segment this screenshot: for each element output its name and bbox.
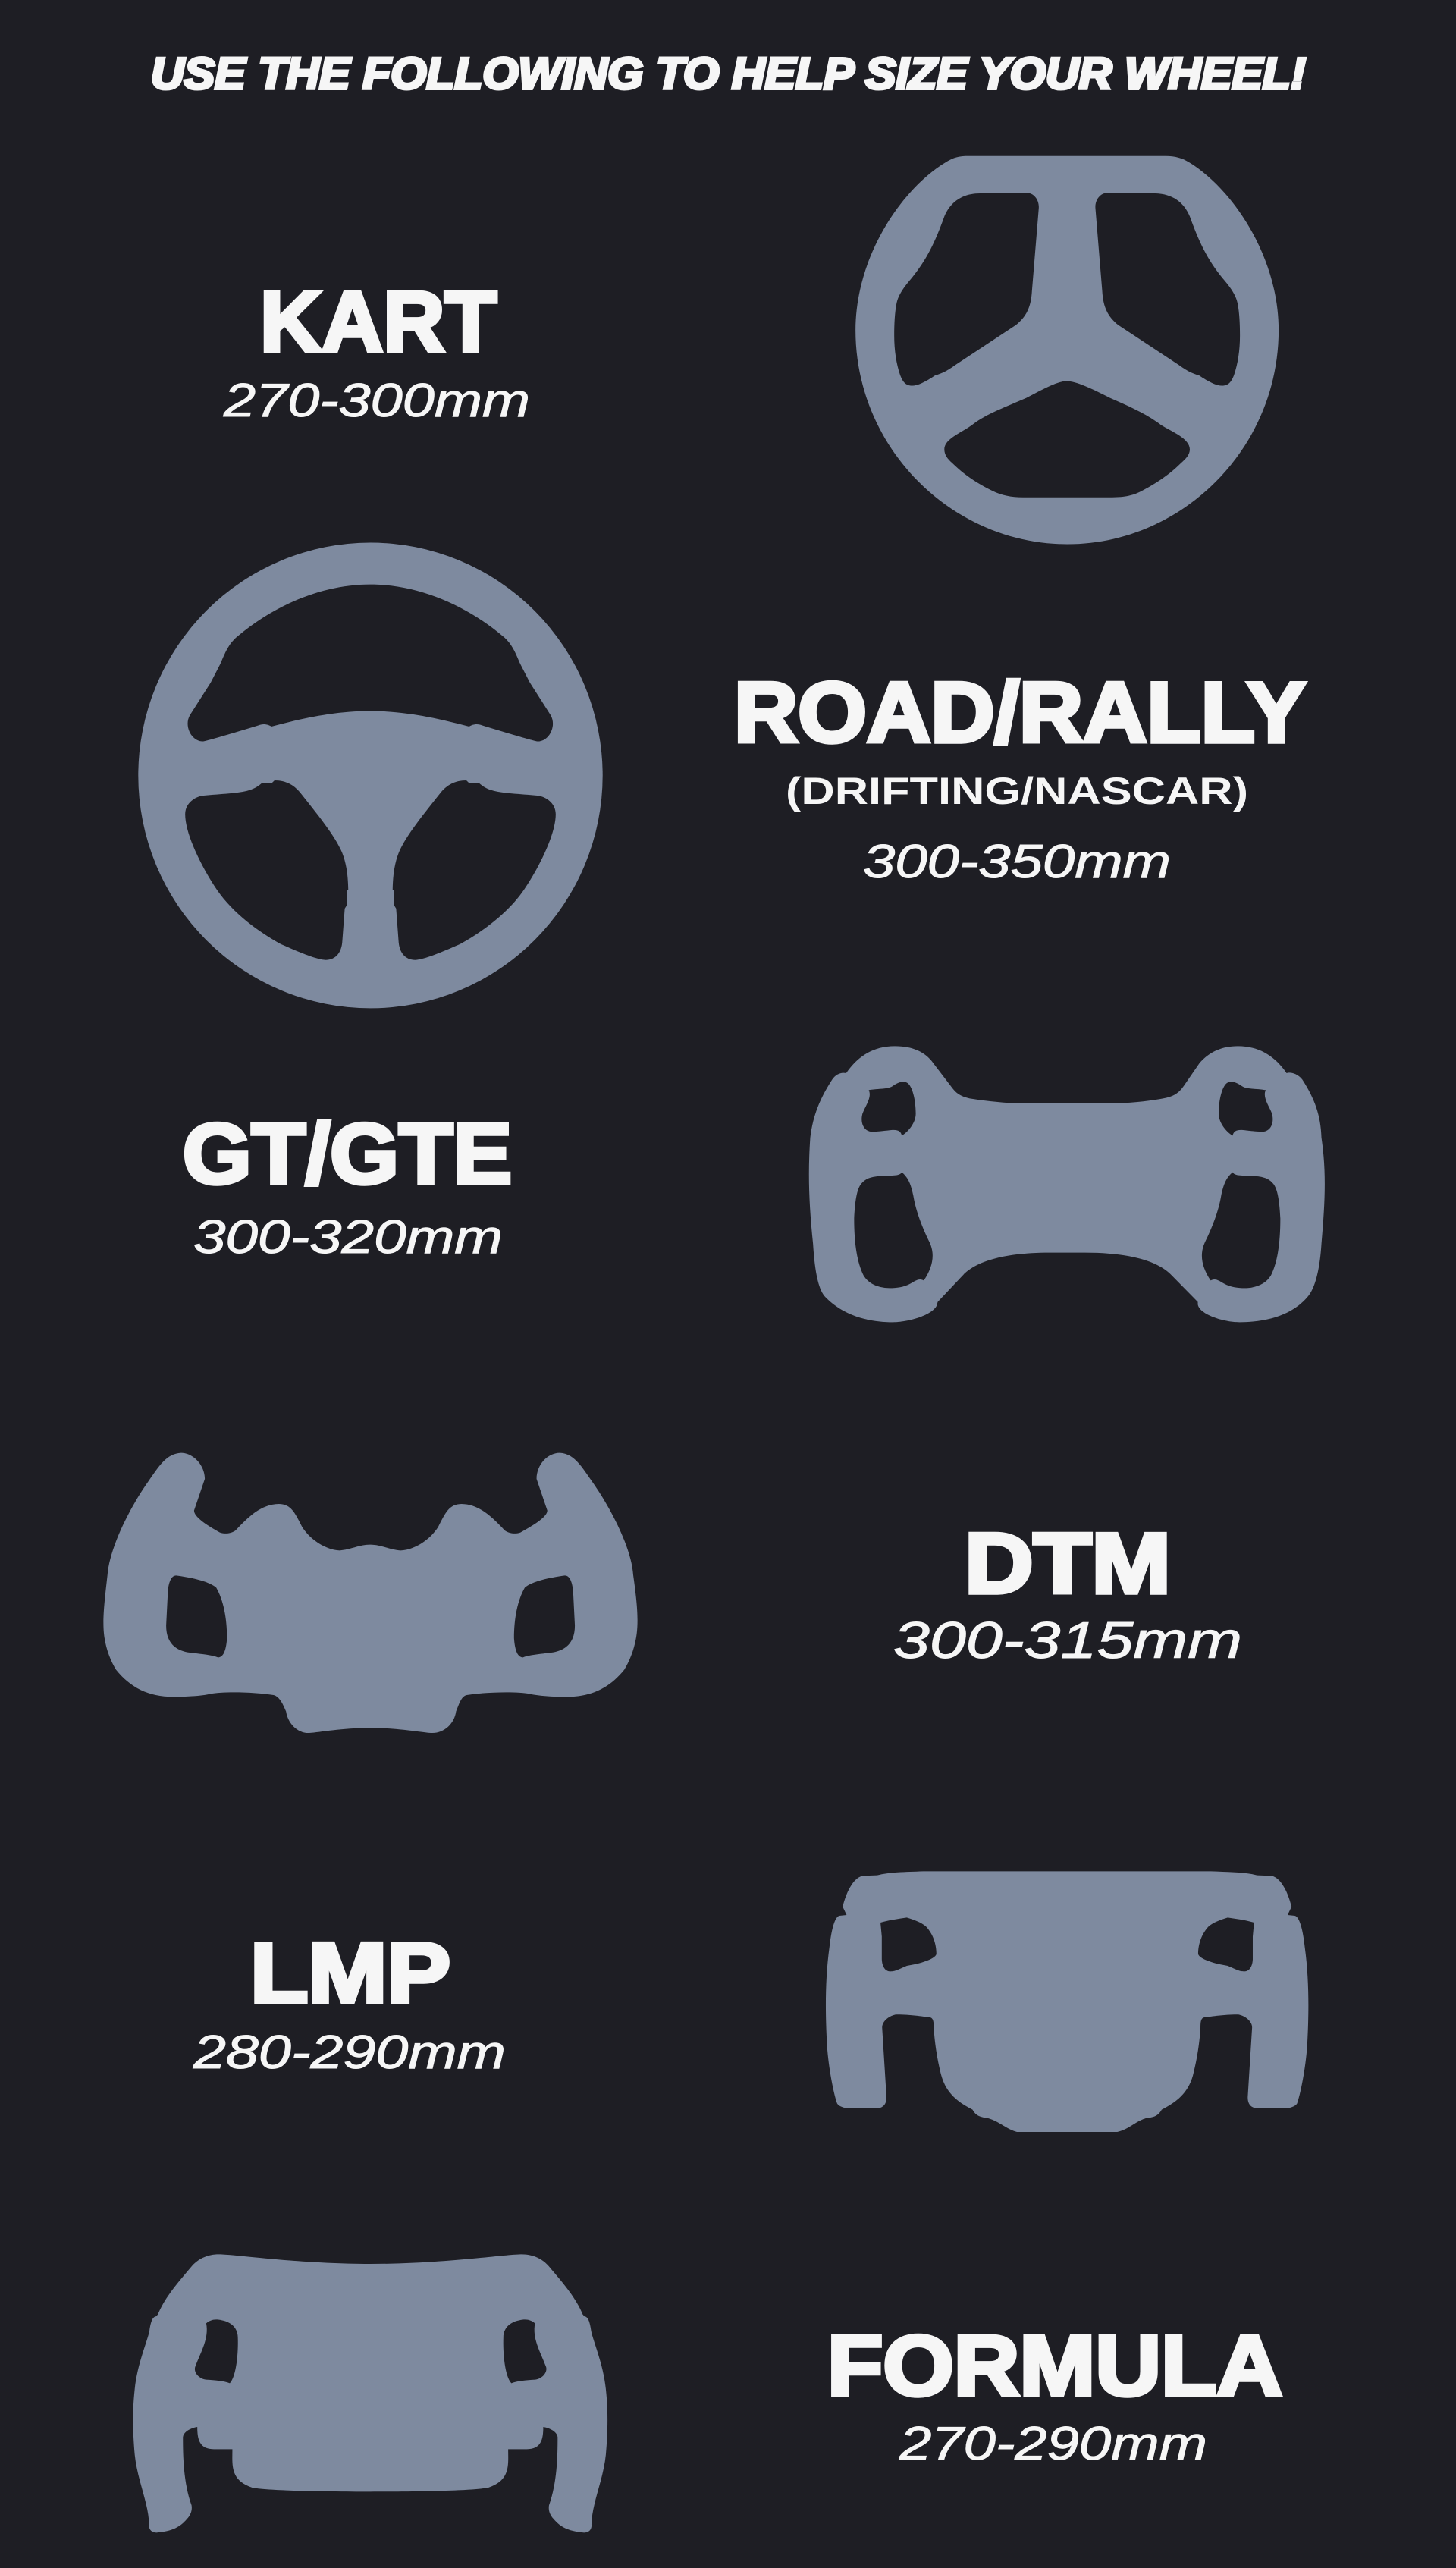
icon: dtm wheel: [103, 1453, 638, 1733]
title: USE THE FOLLOWING TO HELP SIZE YOUR WHEEL!: [151, 49, 1306, 99]
text: dtm size: 300-315mm: [893, 1612, 1242, 1669]
icon: kart wheel: [855, 156, 1279, 544]
icon: formula wheel: [133, 2254, 607, 2532]
text: gt size: 300-320mm: [193, 1211, 503, 1264]
heading: KART: KART: [260, 275, 497, 369]
panel: road/rally: [138, 543, 1306, 1008]
heading: DTM: DTM: [965, 1516, 1171, 1611]
icon: road wheel: [138, 543, 603, 1008]
text: kart size: 270-300mm: [223, 375, 530, 427]
heading: LMP: LMP: [250, 1926, 450, 2020]
heading: ROAD/RALLY: ROAD/RALLY: [734, 665, 1306, 760]
text: drifting/nascar: (DRIFTING/NASCAR): [786, 770, 1248, 812]
heading: FORMULA: FORMULA: [827, 2318, 1282, 2413]
icon: gt wheel: [809, 1046, 1325, 1322]
panel: formula: [133, 2254, 1282, 2532]
panel: kart: [223, 156, 1279, 544]
panel: gt/gte: [183, 1046, 1325, 1322]
panel: lmp: [193, 1871, 1308, 2132]
text: lmp size: 280-290mm: [193, 2026, 506, 2079]
heading: GT/GTE: GT/GTE: [183, 1107, 512, 1201]
text: formula size: 270-290mm: [899, 2418, 1207, 2470]
icon: lmp wheel: [826, 1871, 1308, 2132]
panel: dtm: [103, 1453, 1242, 1733]
text: road size: 300-350mm: [863, 836, 1171, 888]
